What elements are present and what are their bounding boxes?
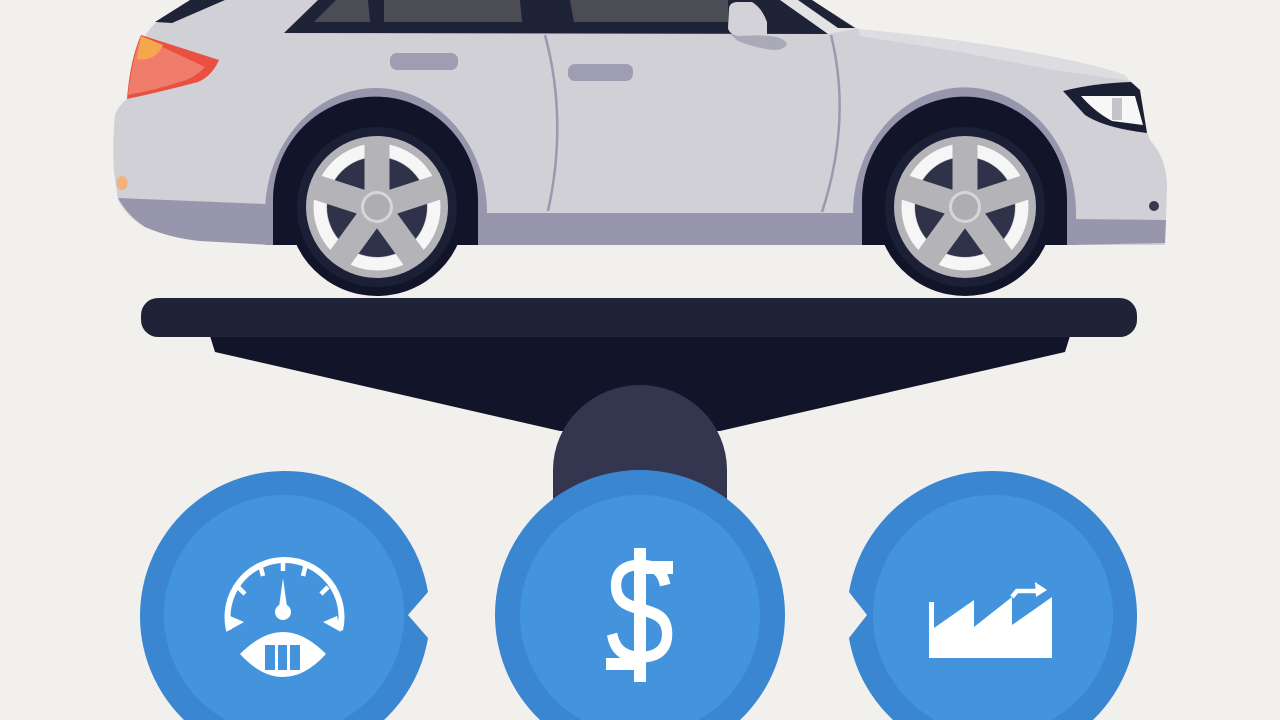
car body [113,0,1167,245]
growth badge [849,471,1137,720]
front door handle [568,64,633,81]
car [113,0,1167,296]
lower skirt [118,198,1166,245]
tail light [127,35,219,99]
badge inner disc [164,495,404,720]
rear wheel arch [265,88,487,245]
scale pivot [553,385,727,510]
rear wheel [288,118,466,296]
windshield trim [780,0,855,34]
front window [570,0,728,22]
hood highlight [858,29,1130,81]
badge disc [849,471,1137,720]
front wheel [876,118,1054,296]
scale platform [141,298,1137,337]
rear spoiler [155,0,225,23]
headlight [1063,82,1147,133]
icon: speedometer [226,560,342,677]
badge inner disc [873,495,1113,720]
icon: dollar sign: $ [606,525,674,697]
bumper sensor [1149,201,1159,211]
front wheel well [862,97,1067,245]
icon: factory with rising arrow [929,582,1052,658]
rear quarter window [314,0,370,22]
rear reflector [116,176,128,190]
rear wheel well [273,97,478,245]
door seams [545,35,840,212]
badge inner disc [520,495,760,720]
window frame [284,0,828,34]
middle window [384,0,522,22]
rear door handle [390,53,458,70]
side mirror [728,2,787,50]
badge disc [140,471,428,720]
scale beam support [210,336,1070,431]
badge disc [495,470,785,720]
front wheel arch [853,87,1076,245]
speedometer badge [140,471,428,720]
dollar badge [495,470,785,720]
